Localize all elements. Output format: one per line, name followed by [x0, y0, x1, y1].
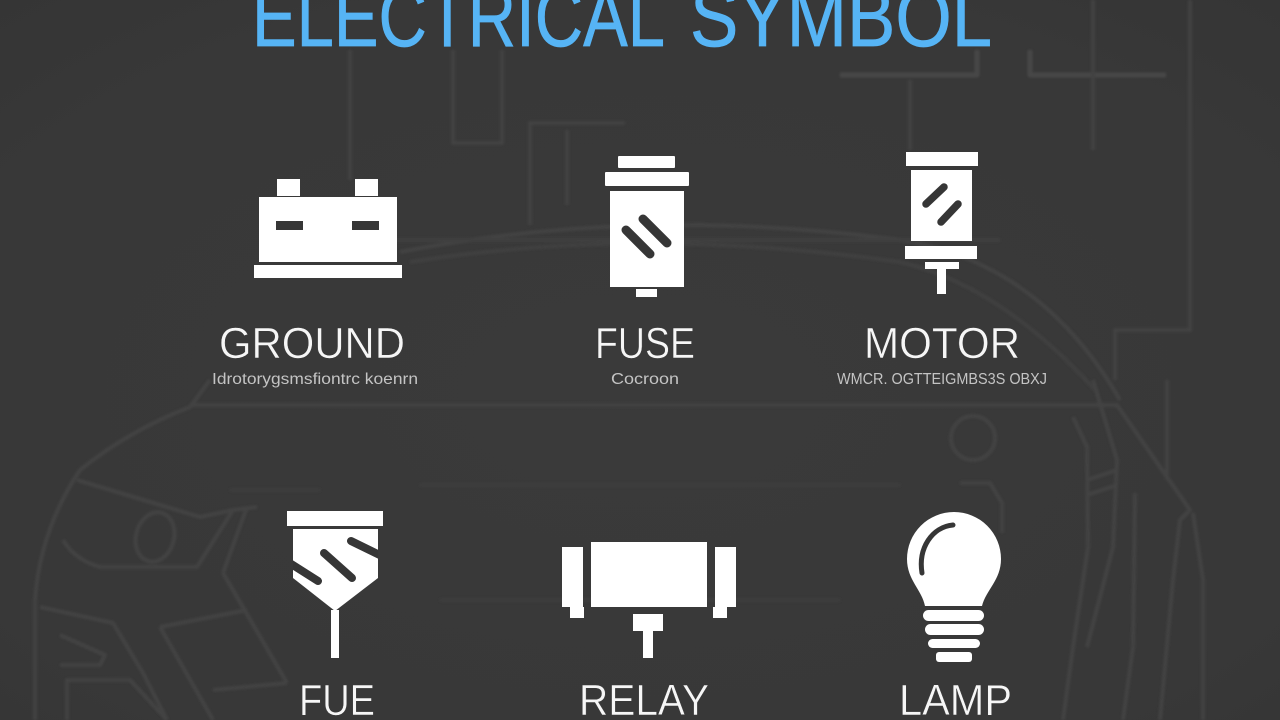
- icon: light bulb: [907, 512, 1001, 662]
- label: fuse: FUSE: [595, 319, 695, 368]
- icon: funnel symbol: [285, 511, 390, 658]
- caption: fuse: Cocroon: [611, 371, 679, 388]
- caption: motor: WMCR. OGTTEIGMBS3S OBXJ: [837, 371, 1047, 388]
- label: motor: MOTOR: [864, 319, 1020, 368]
- icon: relay symbol: [562, 542, 736, 658]
- panel: ground: [212, 179, 418, 388]
- panel: fuse: [595, 156, 695, 388]
- icon: motor symbol: [905, 152, 978, 294]
- panel: fue: [287, 511, 383, 716]
- panel: motor: [837, 152, 1047, 388]
- icon: battery ground symbol: [254, 179, 402, 278]
- label: ground: GROUND: [219, 319, 405, 368]
- panel: lamp: [899, 512, 1012, 720]
- caption: ground: Idrotorygsmsfiontrc koenrn: [212, 371, 418, 388]
- icon: fuse symbol: [605, 156, 689, 297]
- panel: relay: [562, 542, 736, 720]
